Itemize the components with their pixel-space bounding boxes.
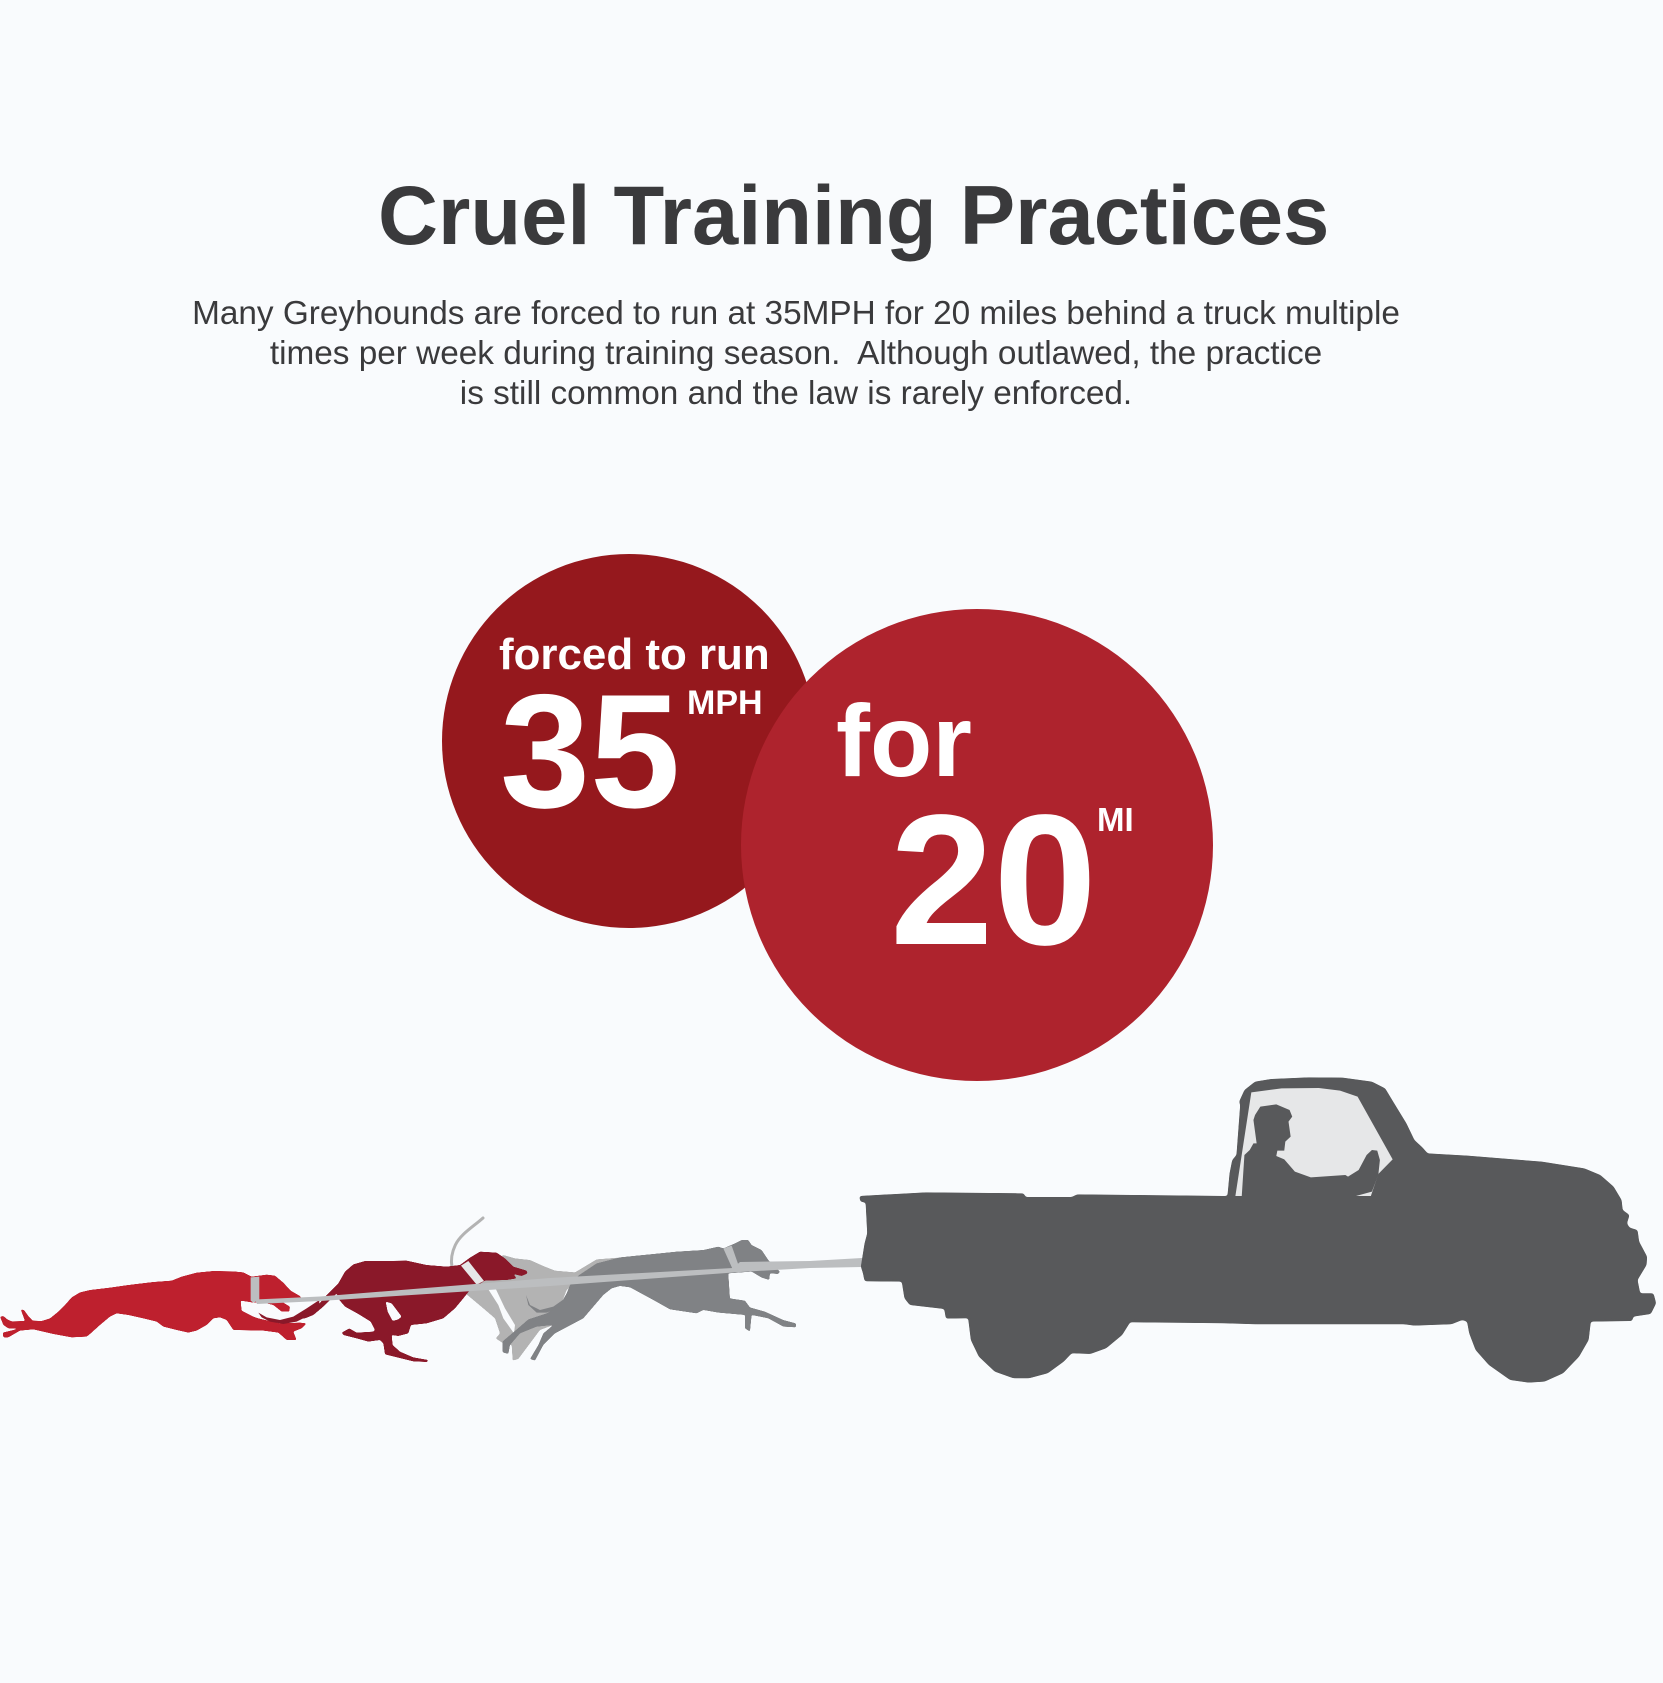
driver silhouette — [1242, 1104, 1380, 1196]
dark grey greyhound — [502, 1240, 796, 1361]
circle: forced to run 35 MPH: forced to run — [499, 630, 770, 679]
circle: forced to run 35 MPH: 35 — [500, 661, 680, 842]
intro text block: times per week during training season. Although outlawed, the practice — [270, 335, 1322, 372]
circle: forced to run 35 MPH: MPH — [687, 684, 763, 722]
circle: for 20 MI: MI — [1097, 801, 1134, 838]
circle: for 20 MI — [741, 609, 1213, 1081]
circle: forced to run 35 MPH — [442, 554, 816, 928]
intro text block: Many Greyhounds are forced to run at 35MPH for 20 miles behind a truck multiple — [192, 295, 1400, 332]
red greyhound — [0, 1271, 319, 1340]
truck body — [859, 1077, 1656, 1383]
intro text block: is still common and the law is rarely enforced. — [460, 375, 1132, 412]
pickup truck with driver — [859, 1077, 1656, 1383]
title: Cruel Training Practices — [378, 169, 1329, 262]
tether rope — [255, 1258, 862, 1304]
cab window — [1235, 1088, 1393, 1196]
intro text block — [192, 295, 1400, 412]
light grey greyhound — [451, 1218, 622, 1361]
circle: for 20 MI: 20 — [890, 777, 1097, 984]
dark red greyhound — [300, 1252, 528, 1362]
circle: for 20 MI: for — [836, 684, 972, 798]
greyhounds on a tether — [0, 1218, 862, 1362]
